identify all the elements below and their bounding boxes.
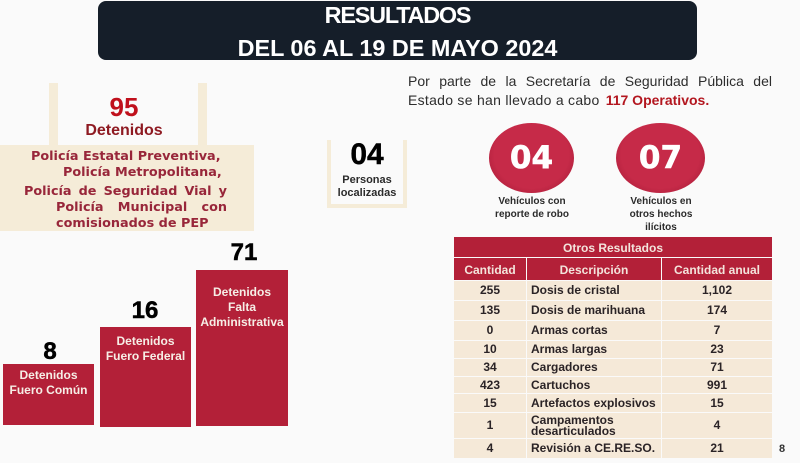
police forces text block: Policía Municipal con bbox=[56, 200, 227, 215]
panel: personas localizadas bbox=[327, 140, 407, 208]
police forces text block: Policía de Seguridad Vial y bbox=[24, 184, 227, 199]
frame post right bbox=[198, 83, 207, 145]
title banner: DEL 06 AL 19 DE MAYO 2024 bbox=[238, 35, 557, 61]
police forces text block: Policía Estatal Preventiva, bbox=[31, 149, 221, 164]
table rows: 34 bbox=[483, 360, 497, 374]
police forces text block: comisionados de PEP bbox=[56, 216, 208, 231]
table title: Otros Resultados bbox=[563, 241, 663, 255]
label personas localizadas: localizadas bbox=[338, 187, 396, 199]
table rows: 15 bbox=[483, 396, 497, 410]
table rows: Cargadores bbox=[531, 360, 598, 374]
table rows: 21 bbox=[710, 441, 724, 455]
table rows: 991 bbox=[707, 378, 727, 392]
table rows: 23 bbox=[710, 342, 724, 356]
bar chart: detenidos bbox=[3, 239, 288, 427]
table rows: 255 bbox=[480, 283, 500, 297]
caption vehiculos robo: reporte de robo bbox=[495, 209, 569, 220]
table rows: 1,102 bbox=[702, 283, 732, 297]
bar falta administrativa: Detenidos bbox=[213, 285, 271, 299]
table rows: 7 bbox=[714, 323, 720, 337]
table rows: 4 bbox=[714, 418, 720, 432]
table header row: Descripción bbox=[560, 263, 628, 277]
number 95: 95 bbox=[110, 92, 138, 122]
label personas localizadas: Personas bbox=[342, 174, 392, 186]
bar fuero comun: Detenidos bbox=[19, 368, 78, 382]
table rows: 135 bbox=[480, 303, 500, 317]
frame post left bbox=[49, 83, 58, 145]
value 16: 16 bbox=[132, 297, 158, 324]
table header row: Cantidad bbox=[464, 263, 516, 277]
intro text: Por parte de la Secretaría de Seguridad Pública del bbox=[408, 73, 772, 89]
table title bbox=[454, 237, 772, 257]
value 8: 8 bbox=[43, 338, 57, 365]
bar falta administrativa: Falta bbox=[228, 300, 256, 314]
table rows: 71 bbox=[710, 360, 724, 374]
police forces text block bbox=[0, 145, 254, 231]
intro text: Estado se han llevado a cabo 117 Operativos. bbox=[408, 92, 709, 108]
table rows: Armas largas bbox=[531, 342, 607, 356]
value 71: 71 bbox=[231, 239, 257, 266]
table rows: desarticulados bbox=[531, 424, 616, 438]
circle: vehiculos con reporte de robo bbox=[489, 123, 574, 193]
table rows: Dosis de cristal bbox=[531, 283, 620, 297]
bar fuero comun bbox=[3, 364, 94, 425]
title banner bbox=[98, 1, 697, 60]
police forces text block: Policía Metropolitana, bbox=[63, 165, 222, 180]
circle: vehiculos otros hechos bbox=[616, 123, 705, 193]
table header row bbox=[454, 258, 772, 280]
page number: 8 bbox=[779, 443, 785, 455]
caption vehiculos robo: Vehículos con bbox=[498, 196, 566, 207]
bar falta administrativa bbox=[196, 270, 288, 426]
table rows: Armas cortas bbox=[531, 323, 608, 337]
table rows: 10 bbox=[483, 342, 497, 356]
caption vehiculos otros hechos: otros hechos bbox=[630, 209, 692, 220]
table rows: 4 bbox=[487, 441, 493, 455]
table header row: Cantidad anual bbox=[674, 263, 760, 277]
caption vehiculos otros hechos bbox=[630, 196, 692, 233]
table rows: 1 bbox=[487, 418, 493, 432]
bar fuero federal: Fuero Federal bbox=[106, 349, 185, 363]
table rows: 15 bbox=[710, 396, 724, 410]
bar fuero comun: Fuero Común bbox=[10, 383, 88, 397]
bar fuero federal bbox=[100, 327, 191, 427]
table rows: Revisión a CE.RE.SO. bbox=[531, 441, 655, 455]
label detenidos: Detenidos bbox=[85, 122, 163, 139]
caption vehiculos otros hechos: Vehículos en bbox=[630, 196, 692, 207]
caption vehiculos otros hechos: ilícitos bbox=[645, 222, 677, 233]
intro text bbox=[408, 73, 772, 108]
number 04: 04 bbox=[350, 138, 384, 171]
circle: vehiculos otros hechos: 07 bbox=[639, 140, 682, 176]
bar falta administrativa: Administrativa bbox=[200, 315, 284, 329]
table rows: Artefactos explosivos bbox=[531, 396, 656, 410]
table rows: 174 bbox=[707, 303, 727, 317]
title banner: RESULTADOS bbox=[325, 2, 470, 28]
table rows: Campamentos bbox=[531, 413, 614, 427]
table rows: Cartuchos bbox=[531, 378, 590, 392]
circle: vehiculos con reporte de robo: 04 bbox=[510, 140, 553, 176]
table: otros resultados bbox=[454, 237, 772, 458]
panel: detenidos total bbox=[0, 83, 254, 231]
table rows: 0 bbox=[487, 323, 493, 337]
caption vehiculos robo bbox=[495, 196, 569, 220]
table rows bbox=[454, 281, 772, 458]
bar fuero federal: Detenidos bbox=[116, 334, 174, 348]
table rows: Dosis de marihuana bbox=[531, 303, 645, 317]
table rows: 423 bbox=[480, 378, 500, 392]
label personas localizadas bbox=[338, 174, 396, 199]
